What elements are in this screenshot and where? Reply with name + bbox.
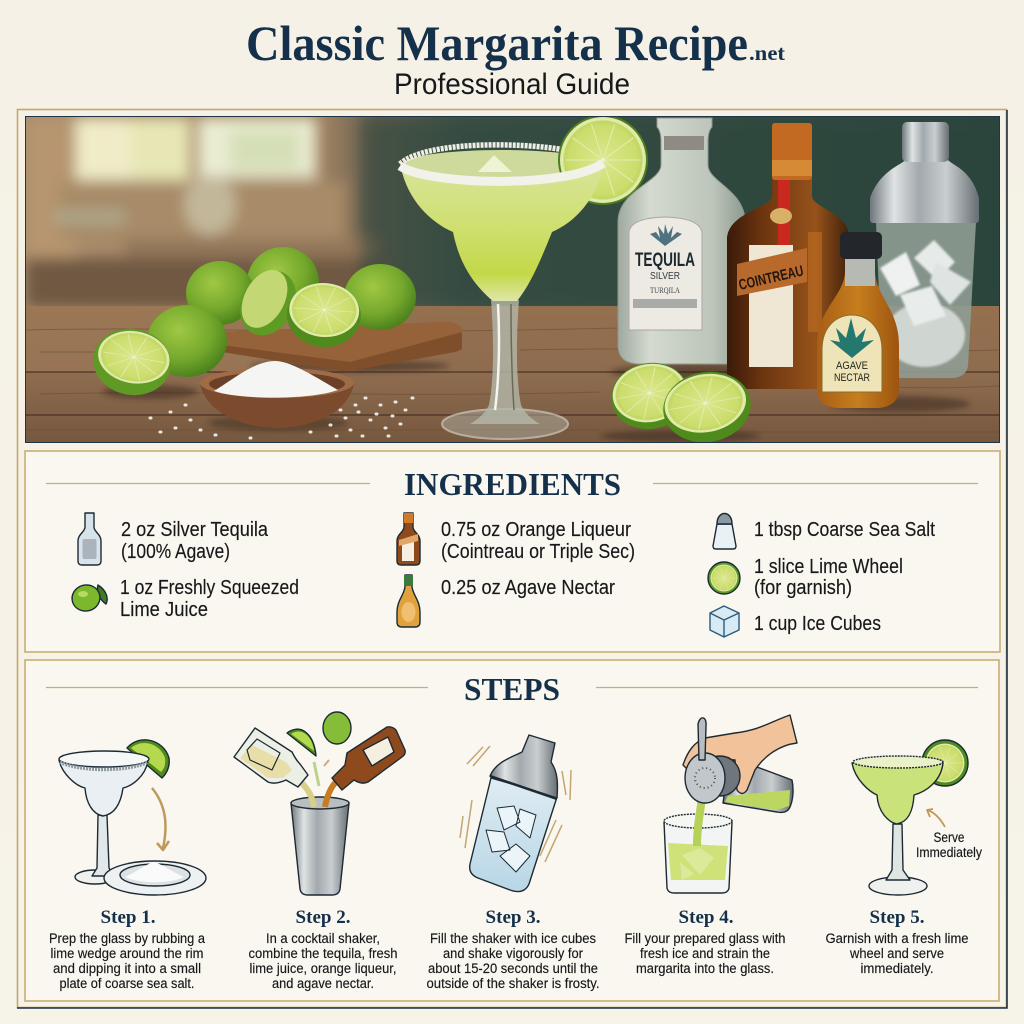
step 5 description: Garnish with a fresh lime: [826, 931, 968, 946]
subtitle: Professional Guide: [394, 68, 630, 101]
icon: agave nectar bottle: [397, 575, 420, 627]
step 2 description: lime juice, orange liqueur,: [250, 961, 396, 976]
step 3 description: [426, 931, 600, 991]
step 2 description: In a cocktail shaker,: [266, 931, 380, 946]
step 2 illustration: [234, 712, 405, 895]
hand: [683, 715, 797, 794]
agave mark on nectar label: [830, 318, 874, 358]
cointreau label text: COINTREAU: [737, 262, 805, 294]
shaker: [470, 778, 557, 892]
step 1 description: lime wedge around the rim: [50, 946, 204, 961]
step 2 description: combine the tequila, fresh: [248, 946, 398, 961]
ingredient: sea salt: 1 tbsp Coarse Sea Salt: [754, 518, 935, 541]
step 2 label: Step 2.: [296, 907, 350, 928]
step 5 description: [826, 931, 968, 976]
title suffix: .net: [749, 41, 785, 65]
agave label text: AGAVE: [836, 360, 868, 372]
ingredient: orange liqueur: 0.75 oz Orange Liqueur: [441, 518, 631, 541]
ingredient: agave nectar: 0.25 oz Agave Nectar: [441, 576, 615, 599]
ingredient: lime wheel note: (for garnish): [754, 576, 852, 599]
icon: ice cube: [710, 606, 739, 637]
ingredient: lime juice: 1 oz Freshly Squeezed: [120, 576, 299, 599]
step 1 description: [49, 931, 205, 991]
icon: orange liqueur bottle: [397, 513, 420, 565]
step 4 description: fresh ice and strain the: [640, 946, 770, 961]
margarita glass stem and foot: [442, 300, 568, 439]
step 3 illustration: [460, 735, 571, 892]
step 1 description: and dipping it into a small: [53, 961, 201, 976]
cutting board: [222, 322, 462, 371]
tequila label text: TEQUILA: [635, 250, 695, 271]
serve immediately note: Serve: [934, 830, 964, 845]
cointreau bottle: [727, 123, 850, 389]
cut limes on the table: [611, 362, 751, 442]
scattered salt grains: [150, 398, 413, 438]
margarita bowl: [401, 165, 604, 301]
lime wedge: [287, 729, 316, 756]
pours: [302, 783, 314, 807]
salted front rim: [400, 163, 603, 181]
panel: steps: [25, 660, 999, 1001]
step 4 description: margarita into the glass.: [636, 961, 774, 976]
hero photo panel: [25, 115, 1000, 449]
agave nectar bottle: [817, 232, 899, 408]
ingredient: ice cubes: 1 cup Ice Cubes: [754, 612, 881, 635]
serve immediately note: Immediately: [916, 845, 982, 860]
step 1 illustration: [59, 740, 206, 895]
silver label text: SILVER: [650, 271, 680, 282]
limes on the board: [186, 247, 416, 349]
tilted tequila bottle: [234, 728, 308, 787]
ingredient: lime juice line 2: Lime Juice: [120, 598, 208, 621]
arrow: [927, 809, 945, 827]
step 5 description: wheel and serve: [849, 946, 944, 961]
agave mark on tequila label: [650, 224, 682, 246]
step 5 description: immediately.: [860, 961, 934, 976]
lime wheel: [922, 740, 968, 786]
step 4 label: Step 4.: [679, 907, 733, 928]
pouring tin: [723, 757, 793, 812]
tequila bottle: [618, 118, 745, 364]
pour stream: [697, 797, 702, 846]
step 5 label: Step 5.: [870, 907, 924, 928]
icon: lime: [69, 582, 107, 614]
step 1 description: Prep the glass by rubbing a: [49, 931, 205, 946]
nectar label text: NECTAR: [834, 372, 870, 384]
title: Classic Margarita Recipe: [246, 15, 748, 71]
arrow: [152, 788, 169, 850]
glass inner surface and back rim: [398, 142, 560, 177]
whole lime: [323, 712, 351, 744]
steps heading: STEPS: [464, 671, 560, 707]
step 3 description: about 15-20 seconds until the: [428, 961, 598, 976]
wooden table: [26, 306, 999, 442]
mixing tin: [291, 803, 349, 895]
step 3 label: Step 3.: [486, 907, 540, 928]
step 2 description: [248, 931, 398, 991]
icon: tequila bottle: [78, 513, 101, 565]
lime wheel on rim: [558, 115, 648, 205]
serve immediately note: [916, 830, 982, 860]
icon: salt shaker: [713, 514, 736, 549]
ingredient: orange liqueur note: (Cointreau or Triple Sec): [441, 540, 635, 563]
tumbler: [664, 822, 732, 893]
motion marks: [460, 746, 571, 862]
step 4 description: Fill your prepared glass with: [624, 931, 786, 946]
salt bowl: [200, 361, 354, 431]
strainer: [685, 718, 740, 803]
blurred background: window and wall: [26, 117, 1000, 312]
step 1 description: plate of coarse sea salt.: [60, 976, 194, 991]
step 5 illustration: [852, 740, 968, 895]
tequila sub label text: TURQILA: [650, 286, 680, 295]
ingredient: tequila note: (100% Agave): [121, 540, 230, 563]
icon: lime wheel: [708, 562, 740, 594]
step 2 description: and agave nectar.: [272, 976, 374, 991]
step 4 illustration: [664, 715, 797, 893]
step 1 label: Step 1.: [101, 907, 155, 928]
cocktail shaker with ice: [870, 122, 979, 378]
object shadows on table: [102, 360, 970, 442]
ingredients heading: INGREDIENTS: [404, 466, 621, 502]
lime wedge: [127, 740, 169, 778]
ingredient: tequila: 2 oz Silver Tequila: [121, 518, 269, 541]
panel: ingredients: [25, 451, 1000, 652]
step 3 description: Fill the shaker with ice cubes: [430, 931, 596, 946]
step 3 description: outside of the shaker is frosty.: [426, 976, 600, 991]
tilted liqueur bottle: [332, 727, 405, 790]
limes on the table: [88, 305, 227, 401]
step 3 description: and shake vigorously for: [443, 946, 583, 961]
ingredient: lime wheel: 1 slice Lime Wheel: [754, 555, 903, 578]
step 4 description: [624, 931, 786, 976]
